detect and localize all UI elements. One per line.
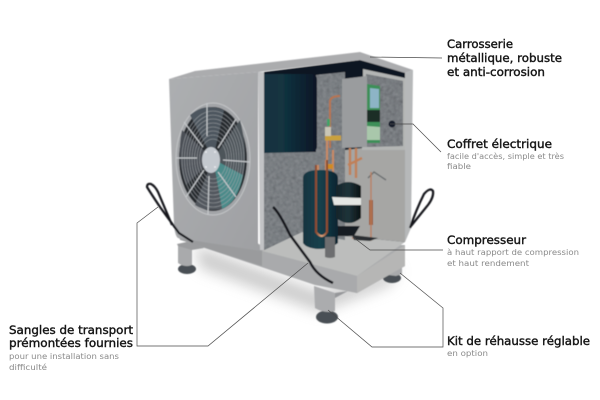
water tank [264,74,317,153]
ground shadow [195,245,400,312]
leader: carrosserie [370,57,442,58]
leader: sangles [137,207,308,346]
fan hub [202,147,220,173]
front post [258,72,264,250]
label: kit de réhausse [447,334,590,358]
copper pipes [318,96,386,240]
label: coffret électrique: Coffret électrique [447,137,552,151]
interior back wall [264,60,405,250]
box door [342,76,367,148]
roof [169,52,413,79]
leader: coffret électrique [390,124,441,152]
label: compresseur [447,233,579,268]
accumulator [332,182,378,241]
label: carrosserie [447,37,562,79]
foot: right [383,262,402,283]
label: compresseur: et haut rendement [447,258,530,268]
pipe loop front of compressor [316,160,327,236]
label: carrosserie: et anti-corrosion [447,65,545,79]
base plate [178,232,405,293]
label: carrosserie: métallique, robuste [447,51,562,65]
strap: right [410,190,433,228]
foot: back left [177,240,204,274]
strap: middle [273,207,333,283]
label: sangles: prémontées fournies [9,336,133,350]
label: kit de réhausse: en option [447,348,488,358]
leader: compresseur [353,237,443,250]
label: sangles: difficulté [9,362,47,372]
label: kit de réhausse: Kit de réhausse réglable [447,334,590,348]
label: coffret électrique: facile d'accès, simple et très [447,151,564,161]
right post [405,70,413,242]
right interior wall [345,148,405,242]
foot: front [314,286,348,324]
heat pump unit [147,52,433,324]
compressor [303,170,338,249]
insulation felt [264,72,345,250]
label: carrosserie: Carrosserie [447,37,513,51]
leader: kit de réhausse [328,273,443,347]
label: sangles: pour une installation sans [9,351,119,361]
strap: left [147,184,193,242]
label: compresseur: Compresseur [447,233,526,247]
label: coffret électrique [447,137,564,171]
label: compresseur: à haut rapport de compression [447,247,579,257]
label: sangles [9,323,133,372]
label: sangles: Sangles de transport [9,323,133,337]
body side panel [169,72,262,251]
electrical box [342,69,405,150]
label: coffret électrique: fiable [447,161,471,171]
fan grille [176,103,250,215]
small cylinder [325,237,335,258]
